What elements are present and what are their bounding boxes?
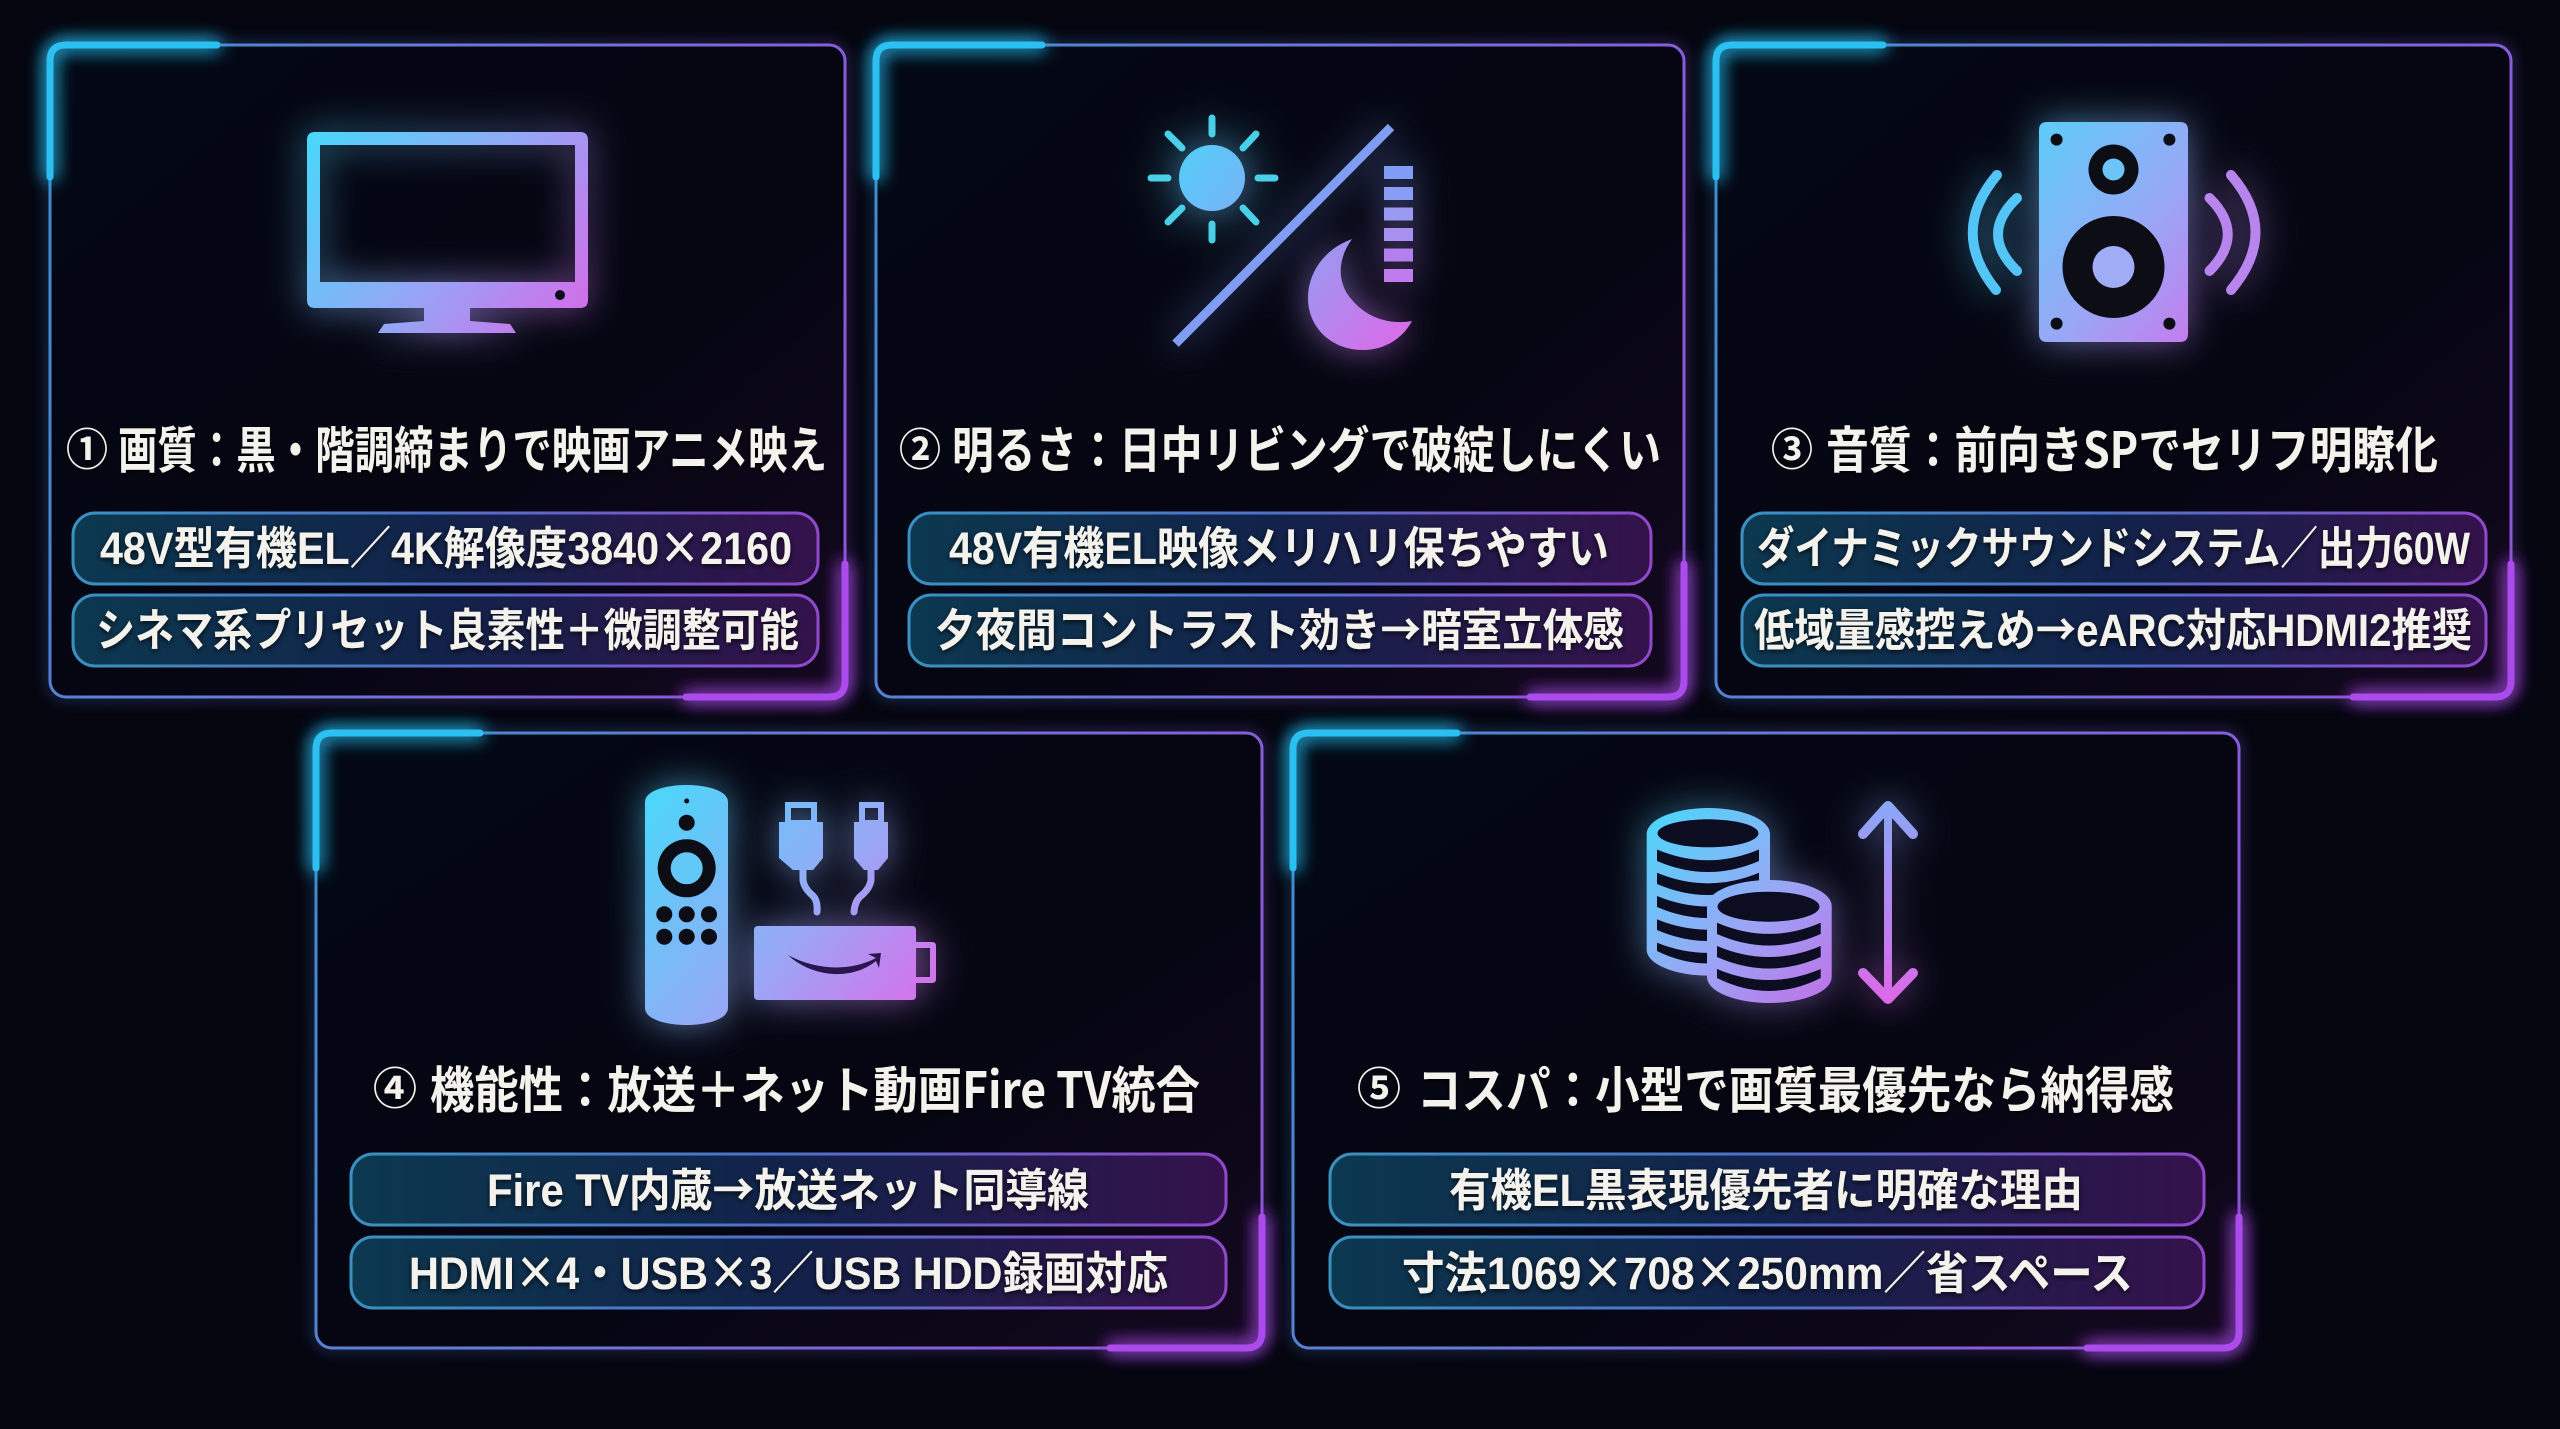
icon: remote, cables and streaming stick [645, 785, 936, 1025]
heading: sound: ③ [1771, 414, 1813, 478]
panel 3: sound [1716, 45, 2511, 697]
spec pill: black reproduction [1330, 1154, 2204, 1225]
heading: features: 機能性：放送＋ネット動画Fire TV統合 [430, 1051, 1200, 1123]
spec pill: sound system [1742, 513, 2486, 584]
icon: sun, moon and brightness scale [1151, 118, 1413, 350]
spec pill: built-in Fire TV: Fire TV内蔵→放送ネット同導線 [487, 1154, 1089, 1219]
heading: brightness: ② [899, 414, 941, 478]
spec pill: evening contrast: 夕夜間コントラスト効き→暗室立体感 [935, 594, 1624, 659]
spec pill: ports: HDMI×4・USB×3／USB HDD録画対応 [409, 1237, 1168, 1302]
heading: features: ④ [373, 1053, 417, 1117]
spec pill: cinema preset: シネマ系プリセット良素性＋微調整可能 [96, 605, 799, 656]
heading: picture quality: ① [66, 414, 108, 478]
spec pill: bass note: 低域量感控えめ→eARC対応HDMI2推奨 [1754, 594, 2472, 659]
heading: picture quality: 画質：黒・階調締まりで映画アニメ映え [118, 411, 827, 483]
heading: value: コスパ：小型で画質最優先なら納得感 [1417, 1051, 2174, 1123]
spec pill: contrast [909, 513, 1651, 584]
spec pill: built-in Fire TV [351, 1154, 1226, 1225]
spec pill: dimensions: 寸法1069×708×250mm／省スペース [1402, 1237, 2133, 1302]
panel 4: features [316, 733, 1262, 1348]
heading: brightness: 明るさ：日中リビングで破綻しにくい [952, 411, 1661, 483]
spec pill: contrast: 48V有機EL映像メリハリ保ちやすい [949, 523, 1609, 574]
panel 1: picture quality [50, 45, 845, 697]
panel 2: brightness [876, 45, 1684, 697]
panel 5: value [1293, 733, 2239, 1348]
heading: value: ⑤ [1357, 1053, 1401, 1117]
icon: speaker with sound waves [1973, 122, 2256, 342]
spec pill: panel type and resolution: 48V型有機EL／4K解像度3840×2160 [100, 512, 792, 577]
icon: television [307, 132, 588, 333]
heading: sound: 音質：前向きSPでセリフ明瞭化 [1826, 411, 2438, 483]
spec pill: black reproduction: 有機EL黒表現優先者に明確な理由 [1449, 1165, 2083, 1216]
spec pill: cinema preset [73, 595, 818, 666]
icon: coin stacks and up-down arrow [1647, 806, 1913, 1003]
